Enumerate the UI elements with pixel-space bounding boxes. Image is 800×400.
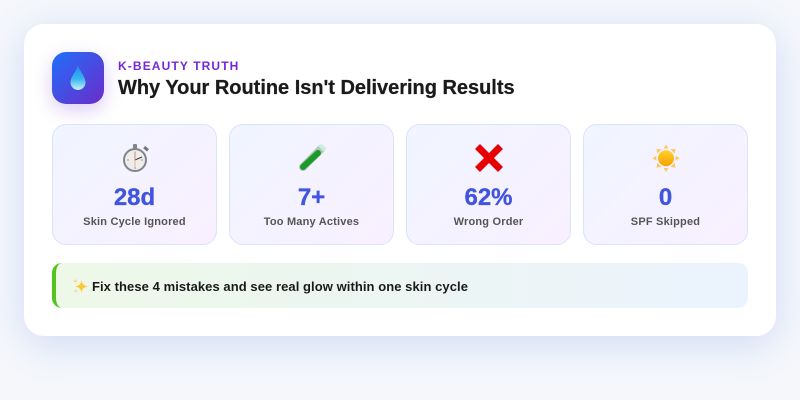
icon: cross mark	[475, 144, 503, 172]
main card	[24, 24, 776, 336]
icon: stopwatch	[123, 144, 149, 172]
label: SPF Skipped	[631, 216, 700, 228]
icon: sun	[652, 144, 680, 172]
callout text: Fix these 4 mistakes and see real glow within one skin cycle	[92, 279, 468, 294]
eyebrow label: K-BEAUTY TRUTH	[118, 59, 239, 73]
stat card: too many actives	[229, 124, 394, 245]
title: Why Your Routine Isn't Delivering Results	[118, 77, 515, 99]
value: 0	[659, 184, 672, 211]
label: Too Many Actives	[264, 216, 359, 228]
value: 62%	[464, 184, 513, 211]
icon: water drop tile	[52, 52, 104, 104]
stat card: wrong order	[406, 124, 571, 245]
value: 7+	[298, 184, 325, 211]
stat card: spf skipped	[583, 124, 748, 245]
callout	[52, 263, 748, 308]
icon: sparkles	[72, 278, 88, 294]
label: Wrong Order	[454, 216, 523, 228]
value: 28d	[114, 184, 155, 211]
label: Skin Cycle Ignored	[83, 216, 186, 228]
icon: test tube	[299, 144, 326, 171]
stat card: skin cycle	[52, 124, 217, 245]
